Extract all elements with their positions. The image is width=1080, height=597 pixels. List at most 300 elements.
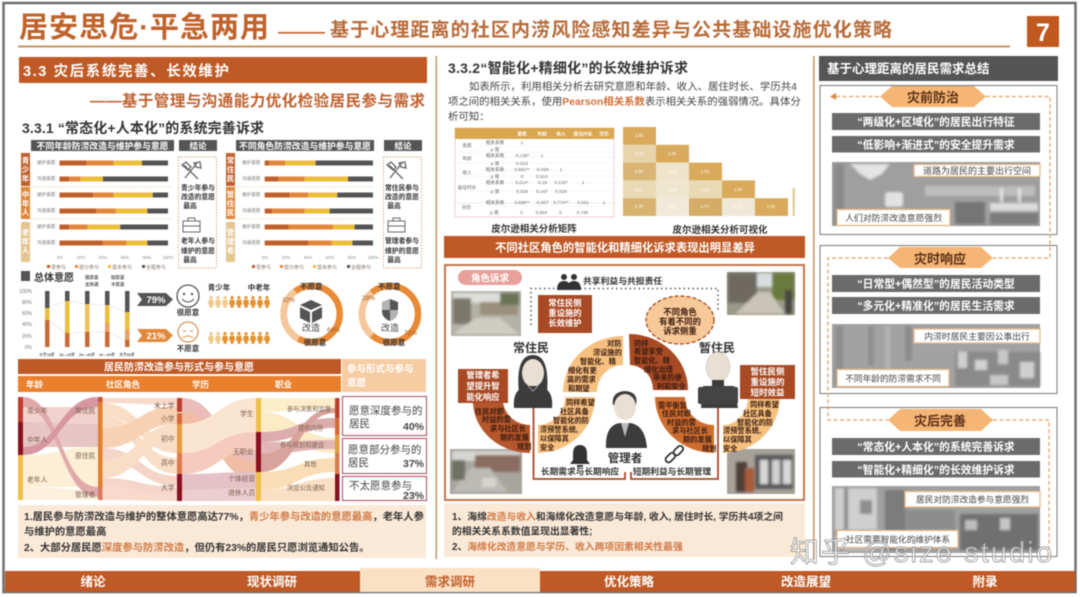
chart: participation by age: 年: [22, 198, 30, 208]
box: resident long-term: 重设施的: [548, 308, 582, 318]
panel: age conclusion: [178, 140, 217, 268]
chart: participation by role: 住: [227, 164, 235, 174]
icon: bell: [570, 445, 590, 467]
chart: overall willingness: 18—25岁: [59, 352, 75, 357]
chart: overall willingness: 40%: [22, 322, 33, 328]
box: manager desire: 能化响应: [466, 392, 500, 402]
table header: participation form: 意愿: [347, 377, 367, 389]
chart: participation by age: 20%: [77, 255, 85, 260]
table: Pearson correlation matrix: 相关系数: [486, 166, 505, 173]
arc: temporary resident smart demand: 同样: [634, 339, 648, 348]
arc: manager right: 需平衡暂: [658, 401, 687, 410]
table: Pearson correlation matrix: 1: [521, 140, 524, 145]
page number: [1027, 16, 1059, 47]
bar: travel feature: “两级化+区域化”的居民出行特征: [857, 114, 1015, 128]
navigation bar: 现状调研: [247, 574, 297, 589]
photo: street 1: [451, 291, 521, 336]
sankey labels: 个体经营: [228, 474, 255, 483]
sankey labels: 高中: [161, 458, 175, 467]
label: strong participation: [905, 492, 1040, 507]
table: Pearson correlation matrix: [455, 128, 614, 217]
arc: manager right: 时益的需: [667, 418, 696, 427]
chart: Pearson heatmap: 0.21: [701, 187, 710, 192]
arc: manager right: 求与社区长: [672, 426, 708, 435]
chart: Pearson heatmap: 1.00: [701, 169, 710, 174]
chart: donut renovation: 很愿意: [304, 337, 327, 347]
heading: before disaster: [880, 86, 986, 107]
arc: resident smart demand: 和期望: [568, 384, 590, 393]
box: temporary resident short-term: 暂住民侧: [750, 366, 785, 376]
panel: role conclusion: [384, 140, 422, 268]
sankey labels: 常住民: [75, 406, 96, 415]
chart: participation by age: 沟通意愿: [37, 239, 56, 246]
chart: Pearson heatmap: -0.05: [667, 169, 677, 174]
chart: people pictogram: [208, 282, 271, 344]
icon: tools: [387, 162, 406, 179]
arc: manager left: [473, 403, 531, 453]
chart: participation by age: 沟通意愿: [37, 175, 56, 182]
table: Pearson correlation matrix: 1: [603, 200, 606, 205]
chart: participation by age: 60%: [121, 255, 129, 260]
navigation bar: 附录: [972, 575, 998, 589]
table: Pearson correlation matrix: 0: [521, 174, 524, 179]
bar: system need: [832, 438, 1040, 455]
chart: participation by role: 40%: [304, 255, 312, 260]
arc: temporary resident early warning: [723, 397, 780, 453]
text block: middle conclusions: 改造与收入和海绵化改造意愿与年龄, 收入, 居住时长, 学历共4项之间: [487, 512, 783, 523]
chart: participation by role: 全程参与: [351, 264, 371, 271]
navigation bar: 需求调研: [425, 574, 475, 589]
connector: manager links: [534, 408, 718, 479]
text block: intro: 如表所示，利用相关分析去研究意愿和年龄、收入、居住时长、学历共4: [469, 80, 797, 93]
chart: Pearson heatmap: 0.66: [635, 169, 644, 174]
chart: overall willingness: 41—60岁: [99, 352, 115, 357]
panel: section 3.3 heading: ——基于管理与沟通能力优化检验居民参与需求: [90, 91, 425, 110]
captions: [491, 223, 768, 236]
table: Pearson correlation matrix: 1: [541, 153, 544, 158]
table header: participation form: 职业: [275, 380, 293, 390]
box: resident long-term: 常住民侧: [548, 298, 582, 308]
arc: manager right: [655, 397, 716, 453]
chart: participation by age: 沟通意愿: [37, 207, 56, 214]
callout: 79% willing: 很愿意: [177, 307, 200, 317]
banner: role difference: 不同社区角色的智能化和精细化诉求表现出明显差异: [495, 240, 755, 254]
chart: participation by role: 者: [227, 245, 235, 255]
heading: after disaster: 灾后完善: [914, 414, 966, 428]
bar: maintenance need: “智能化+精细化”的长效维护诉求: [857, 462, 1015, 476]
callout: different roles oval: [646, 296, 714, 344]
arc: resident smart demand: 细化有更: [568, 366, 598, 375]
panel: role conclusion: 改造的意愿: [385, 192, 419, 201]
table: Pearson correlation matrix: 0.210*: [554, 180, 568, 185]
text block: intro: 析可知：: [448, 110, 490, 123]
chart: Pearson heatmap: -0.14: [634, 151, 644, 156]
chart: overall willingness: 总体意愿: [34, 271, 74, 284]
table: Pearson correlation matrix: 0.031: [577, 200, 589, 205]
chart: participation by age: 不同年龄防涝改造与维护参与意愿: [37, 140, 169, 151]
banner: role difference: [444, 236, 805, 258]
chart: overall willingness: 大于60岁: [119, 352, 135, 357]
table: Pearson correlation matrix: 0.013: [516, 161, 528, 166]
bar: activity type: [832, 275, 1040, 292]
chart: participation by age: 人: [22, 208, 30, 217]
sankey labels: 管理者: [75, 490, 96, 499]
table header: participation form: 参与形式与参与: [347, 363, 414, 375]
chart: Pearson heatmap: -0.15: [667, 187, 677, 192]
box: manager desire: 管理者希: [466, 370, 500, 380]
panel: age conclusion: 结论: [189, 141, 207, 151]
box: resident long-term: [538, 295, 592, 333]
chart: overall willingness: 26—40岁: [79, 352, 95, 357]
table: Pearson correlation matrix: p 值: [491, 188, 500, 195]
arc: temporary resident smart demand: 细化治理: [644, 365, 673, 374]
text block: middle conclusions: 的相关关系系数值呈现出显著性;: [452, 524, 592, 538]
table: Pearson correlation matrix: 0.029: [555, 189, 567, 194]
chart: participation by role: 暂: [227, 189, 235, 199]
arc: resident early warning: 以保障其: [540, 434, 569, 443]
arc: manager left: 时益的需: [482, 415, 511, 424]
label: official travel: 内涝时居民主要因公事出行: [924, 330, 1030, 342]
photo: street 2: [727, 272, 795, 315]
bar: system need: “常态化+人本化”的系统完善诉求: [857, 440, 1015, 454]
table: Pearson correlation matrix: 0.944: [536, 210, 548, 215]
label: manager: 管理者: [608, 451, 642, 465]
chart: donut maintenance: [362, 281, 418, 347]
chart: participation by role: 维护意愿: [242, 159, 261, 166]
table: Pearson correlation matrix: 相关系数: [486, 139, 505, 146]
table: Pearson correlation matrix: 0.026: [516, 189, 528, 194]
chart: overall willingness: 60%: [22, 311, 33, 317]
sankey labels: 退休人员: [228, 488, 255, 497]
table header: participation form: 居民防涝改造参与形式与参与意愿: [104, 360, 254, 374]
icon: shield: [382, 299, 398, 321]
chart: participation by age: 年: [22, 236, 30, 246]
chart: overall willingness: 0%: [25, 345, 33, 351]
arc: resident early warning: 社区具备: [560, 407, 590, 416]
box: temporary resident short-term: 短时效益: [750, 388, 785, 398]
chart: participation by role: 沟通意愿: [242, 239, 261, 246]
chart: Pearson heatmap: 1.00: [767, 204, 776, 209]
bar: maintenance need: [832, 461, 1040, 478]
photo: street 4: [727, 449, 795, 494]
callout: 21% unwilling: [137, 322, 200, 353]
chart: donut renovation: [282, 281, 340, 347]
table: Pearson correlation matrix: 0.662**: [514, 167, 530, 172]
photo: street 3: [450, 449, 522, 494]
chart: overall willingness: [19, 271, 135, 357]
chart: donut renovation: 改造: [302, 322, 320, 333]
table: Pearson correlation matrix: 0: [559, 210, 562, 215]
arc: manager right: 规划: [702, 444, 716, 453]
icon: long-term resident figure: [514, 355, 552, 408]
bar: life need: [832, 297, 1040, 314]
arc: temporary resident smart demand: [629, 334, 688, 391]
label: long-term resident: 常住民: [513, 340, 549, 355]
panel: role conclusion: 管理者参与: [385, 236, 419, 245]
page number: 7: [1036, 19, 1050, 47]
bar: activity type: “日常型+偶然型”的居民活动类型: [857, 276, 1015, 290]
chart: donut renovation: 32%: [282, 297, 295, 304]
table header: participation form: 学历: [192, 380, 210, 390]
chart: participation by role: 0%: [262, 255, 268, 260]
chart: participation by age: 40%: [99, 255, 107, 260]
arrow: shared interest dotted link: [531, 288, 718, 325]
arc: manager right: 期的发展: [683, 435, 712, 444]
sankey labels: 大学: [161, 483, 175, 492]
chart: sankey: 提供内容: [298, 423, 324, 432]
panel: age conclusion: 老年人参与: [181, 236, 215, 245]
sankey labels: 原住民: [75, 451, 96, 460]
text block: middle conclusions: [444, 503, 805, 557]
table: Pearson correlation matrix: 学历: [599, 130, 609, 138]
arc: resident smart demand: [563, 336, 623, 393]
table header: participation form: 社区角色: [106, 380, 141, 390]
watermark: 知乎 @size studio: [790, 536, 1052, 569]
table: Pearson correlation matrix: 1: [582, 180, 585, 185]
label: long-term response: 长期需求与长期响应: [541, 466, 619, 476]
table: Pearson correlation matrix: 0.214*: [515, 180, 529, 185]
sankey labels: 中年人: [27, 435, 48, 444]
chart: donut renovation: 68%: [327, 327, 340, 334]
arc: temporary resident smart demand: 希望享受: [634, 347, 663, 356]
panel: age conclusion: 改造的意愿: [181, 192, 215, 201]
panel: role conclusion: 常住民参与: [385, 183, 419, 192]
table: Pearson correlation matrix: 0.748: [577, 210, 589, 215]
tag: role demands: [458, 270, 522, 285]
label: main travel space: 道路为居民的主要出行空间: [923, 165, 1031, 176]
icon: tools: [182, 162, 201, 179]
title: 基于心理距离的社区内涝风险感知差异与公共基础设施优化策略: [330, 18, 892, 41]
chart: participation by age: 0%: [57, 255, 63, 260]
navigation bar: [5, 568, 1075, 592]
chart: participation by age: 年: [22, 173, 30, 183]
arc: resident smart demand: 对防: [607, 339, 621, 348]
sankey labels: 小学: [161, 414, 175, 423]
icon: box: [300, 300, 322, 323]
panel: role conclusion: 维护的意愿: [385, 246, 419, 255]
arc: resident early warning: 涝预警系统,: [540, 425, 578, 434]
label: shared interest: 共享利益与共担责任: [583, 275, 662, 286]
chart: participation by age: 维护意愿: [37, 159, 56, 166]
label: strong willingness: [837, 210, 950, 226]
arc: temporary resident early warning: 涝预警系统,: [723, 426, 761, 435]
chart: overall willingness: 20%: [22, 334, 33, 340]
chart: donut maintenance: 很愿意: [383, 337, 406, 347]
panel: willingness partial 37%: 居民: [348, 457, 369, 469]
chart: Pearson heatmap: 0.03: [734, 204, 743, 209]
panel: willingness deep 40%: [342, 396, 426, 436]
panel: age conclusion: 维护的意愿: [181, 246, 215, 255]
icon: toolbox: [183, 218, 200, 232]
box: manager desire: 望提升智: [466, 381, 500, 391]
heading: during disaster: 灾时响应: [914, 252, 966, 266]
chart: people pictogram: 青少年: [208, 282, 231, 292]
title: 居安思危·平急两用: [19, 11, 269, 44]
navigation bar: 改造展望: [781, 574, 831, 589]
icon: manager figure: [606, 391, 647, 448]
chart: participation by role: 100%: [368, 255, 379, 260]
chart: participation by role: 管: [227, 227, 235, 237]
box: temporary resident short-term: 重设施的: [750, 377, 785, 387]
chart: participation by age: 维护意愿: [37, 223, 56, 230]
panel: section 3.3 heading: [19, 57, 427, 110]
text block: left conclusions: 1.居民参与防涝改造与维护的整体意愿高达77%，: [24, 510, 249, 523]
text block: left conclusions: 深度参与防涝改造，但仍有23%的居民只愿浏览通知公告。: [102, 543, 370, 554]
heading 3.3.1: 3.3.1 “常态化+人本化”的系统完善诉求: [22, 120, 264, 136]
bar: life need: “多元化+精准化”的居民生活需求: [857, 298, 1015, 312]
chart: participation by role: 零参与: [256, 264, 271, 271]
table: Pearson correlation matrix: 相关系数: [486, 199, 505, 206]
icon: toolbox: [388, 218, 405, 232]
chart: participation by role: 沟通意愿: [242, 175, 261, 182]
arc: temporary resident early warning: 安全: [723, 444, 738, 453]
chart: participation by role: 80%: [348, 255, 356, 260]
icon: shared interest people: [557, 274, 581, 290]
panel: role demands: [445, 265, 804, 500]
heading: during disaster: [888, 247, 993, 268]
callout: 79% willing: 79%: [146, 295, 166, 306]
chart: overall willingness: 不愿意: [111, 281, 125, 288]
icon: chain: [664, 445, 684, 464]
arrow: disaster stage flow: [828, 96, 1050, 557]
arc: resident early warning: 同样希望: [566, 398, 595, 407]
chart: participation by role: 维护意愿: [242, 191, 261, 198]
table: Pearson correlation matrix: 0.147: [536, 189, 548, 194]
chart: Pearson heatmap: 1.00: [635, 133, 644, 138]
chart: donut maintenance: 不愿意: [378, 281, 401, 291]
navigation bar: 优化策略: [604, 574, 654, 589]
panel: age conclusion: 青少年参与: [181, 183, 215, 192]
panel: role conclusion: 结论: [394, 141, 412, 151]
title: [19, 11, 892, 44]
text block: middle conclusions: 海绵化改造意愿与学历、收入两项因素相关性最强: [467, 540, 683, 553]
chart: participation by age: 老: [22, 227, 30, 237]
chart: donut maintenance: 72%: [404, 330, 417, 337]
icon: temporary resident figure: [698, 352, 738, 408]
captions: 皮尔逊相关分析矩阵: [491, 223, 577, 235]
table: Pearson correlation matrix: 0.774**: [553, 200, 569, 205]
arrow head: [830, 93, 836, 100]
navigation bar: 绪论: [80, 574, 106, 589]
panel: willingness low 23%: [342, 476, 426, 502]
sankey labels: 老年人: [27, 475, 48, 484]
chart: participation by age: 100%: [163, 255, 174, 260]
panel: section 3.3 heading: 3.3 灾后系统完善、长效维护: [23, 62, 229, 80]
panel: willingness partial 37%: [342, 438, 426, 474]
callout: 21% unwilling: 21%: [146, 331, 166, 342]
table: Pearson correlation matrix: 意愿: [517, 130, 527, 138]
chart: sankey: [18, 397, 340, 501]
chart: participation by role: 60%: [326, 255, 334, 260]
chart: participation by age: 80%: [143, 255, 151, 260]
label: smart maintenance system: [837, 530, 958, 548]
chart: Pearson heatmap: 1.00: [668, 151, 677, 156]
chart: donut maintenance: 改造: [381, 322, 399, 333]
label: strong willingness: 人们对防涝改造意愿强烈: [845, 212, 942, 223]
sankey labels: 无职业: [233, 447, 254, 456]
table: Pearson correlation matrix: p 值: [491, 146, 500, 153]
label: official travel: [914, 329, 1040, 343]
panel: role conclusion: 最高: [387, 255, 401, 264]
table: Pearson correlation matrix: 收入: [462, 169, 472, 176]
table: Pearson correlation matrix: -0.15: [537, 180, 548, 185]
panel: right summary heading: 基于心理距离的居民需求总结: [827, 61, 990, 76]
chart: Pearson heatmap: 1.00: [734, 187, 743, 192]
heading 3.3.2: 3.3.2“智能化+精细化”的长效维护诉求: [448, 60, 688, 76]
chart: overall willingness: 较愿意: [111, 274, 125, 281]
bar: safety need: “低影响+渐进式”的安全提升需求: [857, 138, 1015, 152]
table header: participation form: 年龄: [26, 380, 44, 390]
chart: Pearson heatmap: [623, 127, 795, 216]
callout: different roles oval: 不同角色: [663, 307, 697, 317]
chart: participation by age: 全程参与: [146, 264, 166, 271]
panel: during disaster: [820, 246, 1057, 394]
label: strong participation: 居民对防涝改造参与意愿强烈: [916, 494, 1029, 504]
text block: left conclusions: [18, 505, 427, 558]
panel: age conclusion: 最高: [183, 201, 197, 210]
heading: after disaster: [888, 409, 993, 431]
table: Pearson correlation matrix: 相关系数: [486, 179, 505, 186]
table: Pearson correlation matrix: 年龄: [462, 155, 472, 162]
text block: left conclusions: 与维护的意愿最高: [24, 525, 106, 538]
chart: Pearson heatmap: 0.21: [635, 187, 644, 192]
arc: temporary resident early warning: 同样希望: [750, 400, 779, 409]
bar: travel feature: [832, 113, 1040, 130]
arc: manager left: 期的发展: [500, 433, 529, 442]
table: Pearson correlation matrix: p 值: [491, 173, 500, 180]
text block: left conclusions: 青少年参与改造的意愿最高，老年人参: [249, 512, 424, 523]
sankey labels: 初中: [161, 434, 175, 443]
table: Pearson correlation matrix: 居住时长: [458, 184, 477, 191]
chart: participation by age: 零参与: [51, 264, 66, 271]
table: Pearson correlation matrix: p 值: [491, 160, 500, 167]
photo: flood scene: [832, 324, 1040, 388]
panel: role conclusion: 最高: [387, 201, 401, 210]
panel: right summary heading: [819, 56, 1058, 81]
chart: Pearson heatmap: 0.77: [701, 204, 710, 209]
table header: participation form: [18, 359, 426, 392]
chart: Pearson heatmap: 0.70: [635, 204, 644, 209]
box: manager desire: [458, 369, 508, 403]
panel: willingness deep 40%: 居民: [349, 418, 370, 430]
chart: sankey: 浏览公告通知: [287, 483, 325, 492]
chart: participation by age: 青: [22, 155, 30, 165]
panel: willingness partial 37%: 37%: [403, 458, 425, 470]
chart: participation by role: 20%: [282, 255, 290, 260]
panel: before disaster: [820, 86, 1057, 234]
panel: willingness low 23%: 不太愿意参与: [349, 479, 412, 492]
table: Pearson correlation matrix: 0.699**: [514, 200, 530, 205]
table: Pearson correlation matrix: -0.138*: [515, 153, 530, 158]
text block: left conclusions: 2、大部分居民愿: [24, 541, 102, 554]
chart: participation by age: 中: [22, 189, 29, 199]
chart: donut maintenance: 28%: [362, 295, 375, 302]
arc: manager left: 住民对即: [475, 407, 504, 416]
photo: road scene: [832, 162, 1040, 226]
photo: community scene: [832, 486, 1040, 553]
chart: sankey: 参与规划和建设: [280, 440, 325, 449]
label: age difference: 不同年龄的防涝需求不同: [845, 372, 941, 384]
arc: manager left: 求与社区长: [490, 424, 526, 433]
arc: temporary resident early warning: 智能化的防: [737, 418, 773, 427]
callout: 21% unwilling: 不愿意: [177, 343, 200, 353]
callout: 79% willing: [137, 285, 200, 317]
panel: willingness deep 40%: 40%: [403, 421, 425, 433]
chart: participation by age: 部分参与: [79, 264, 99, 271]
panel: after disaster: [820, 408, 1057, 556]
chart: overall willingness: 100%: [19, 289, 33, 295]
chart: participation by age: [21, 140, 174, 271]
